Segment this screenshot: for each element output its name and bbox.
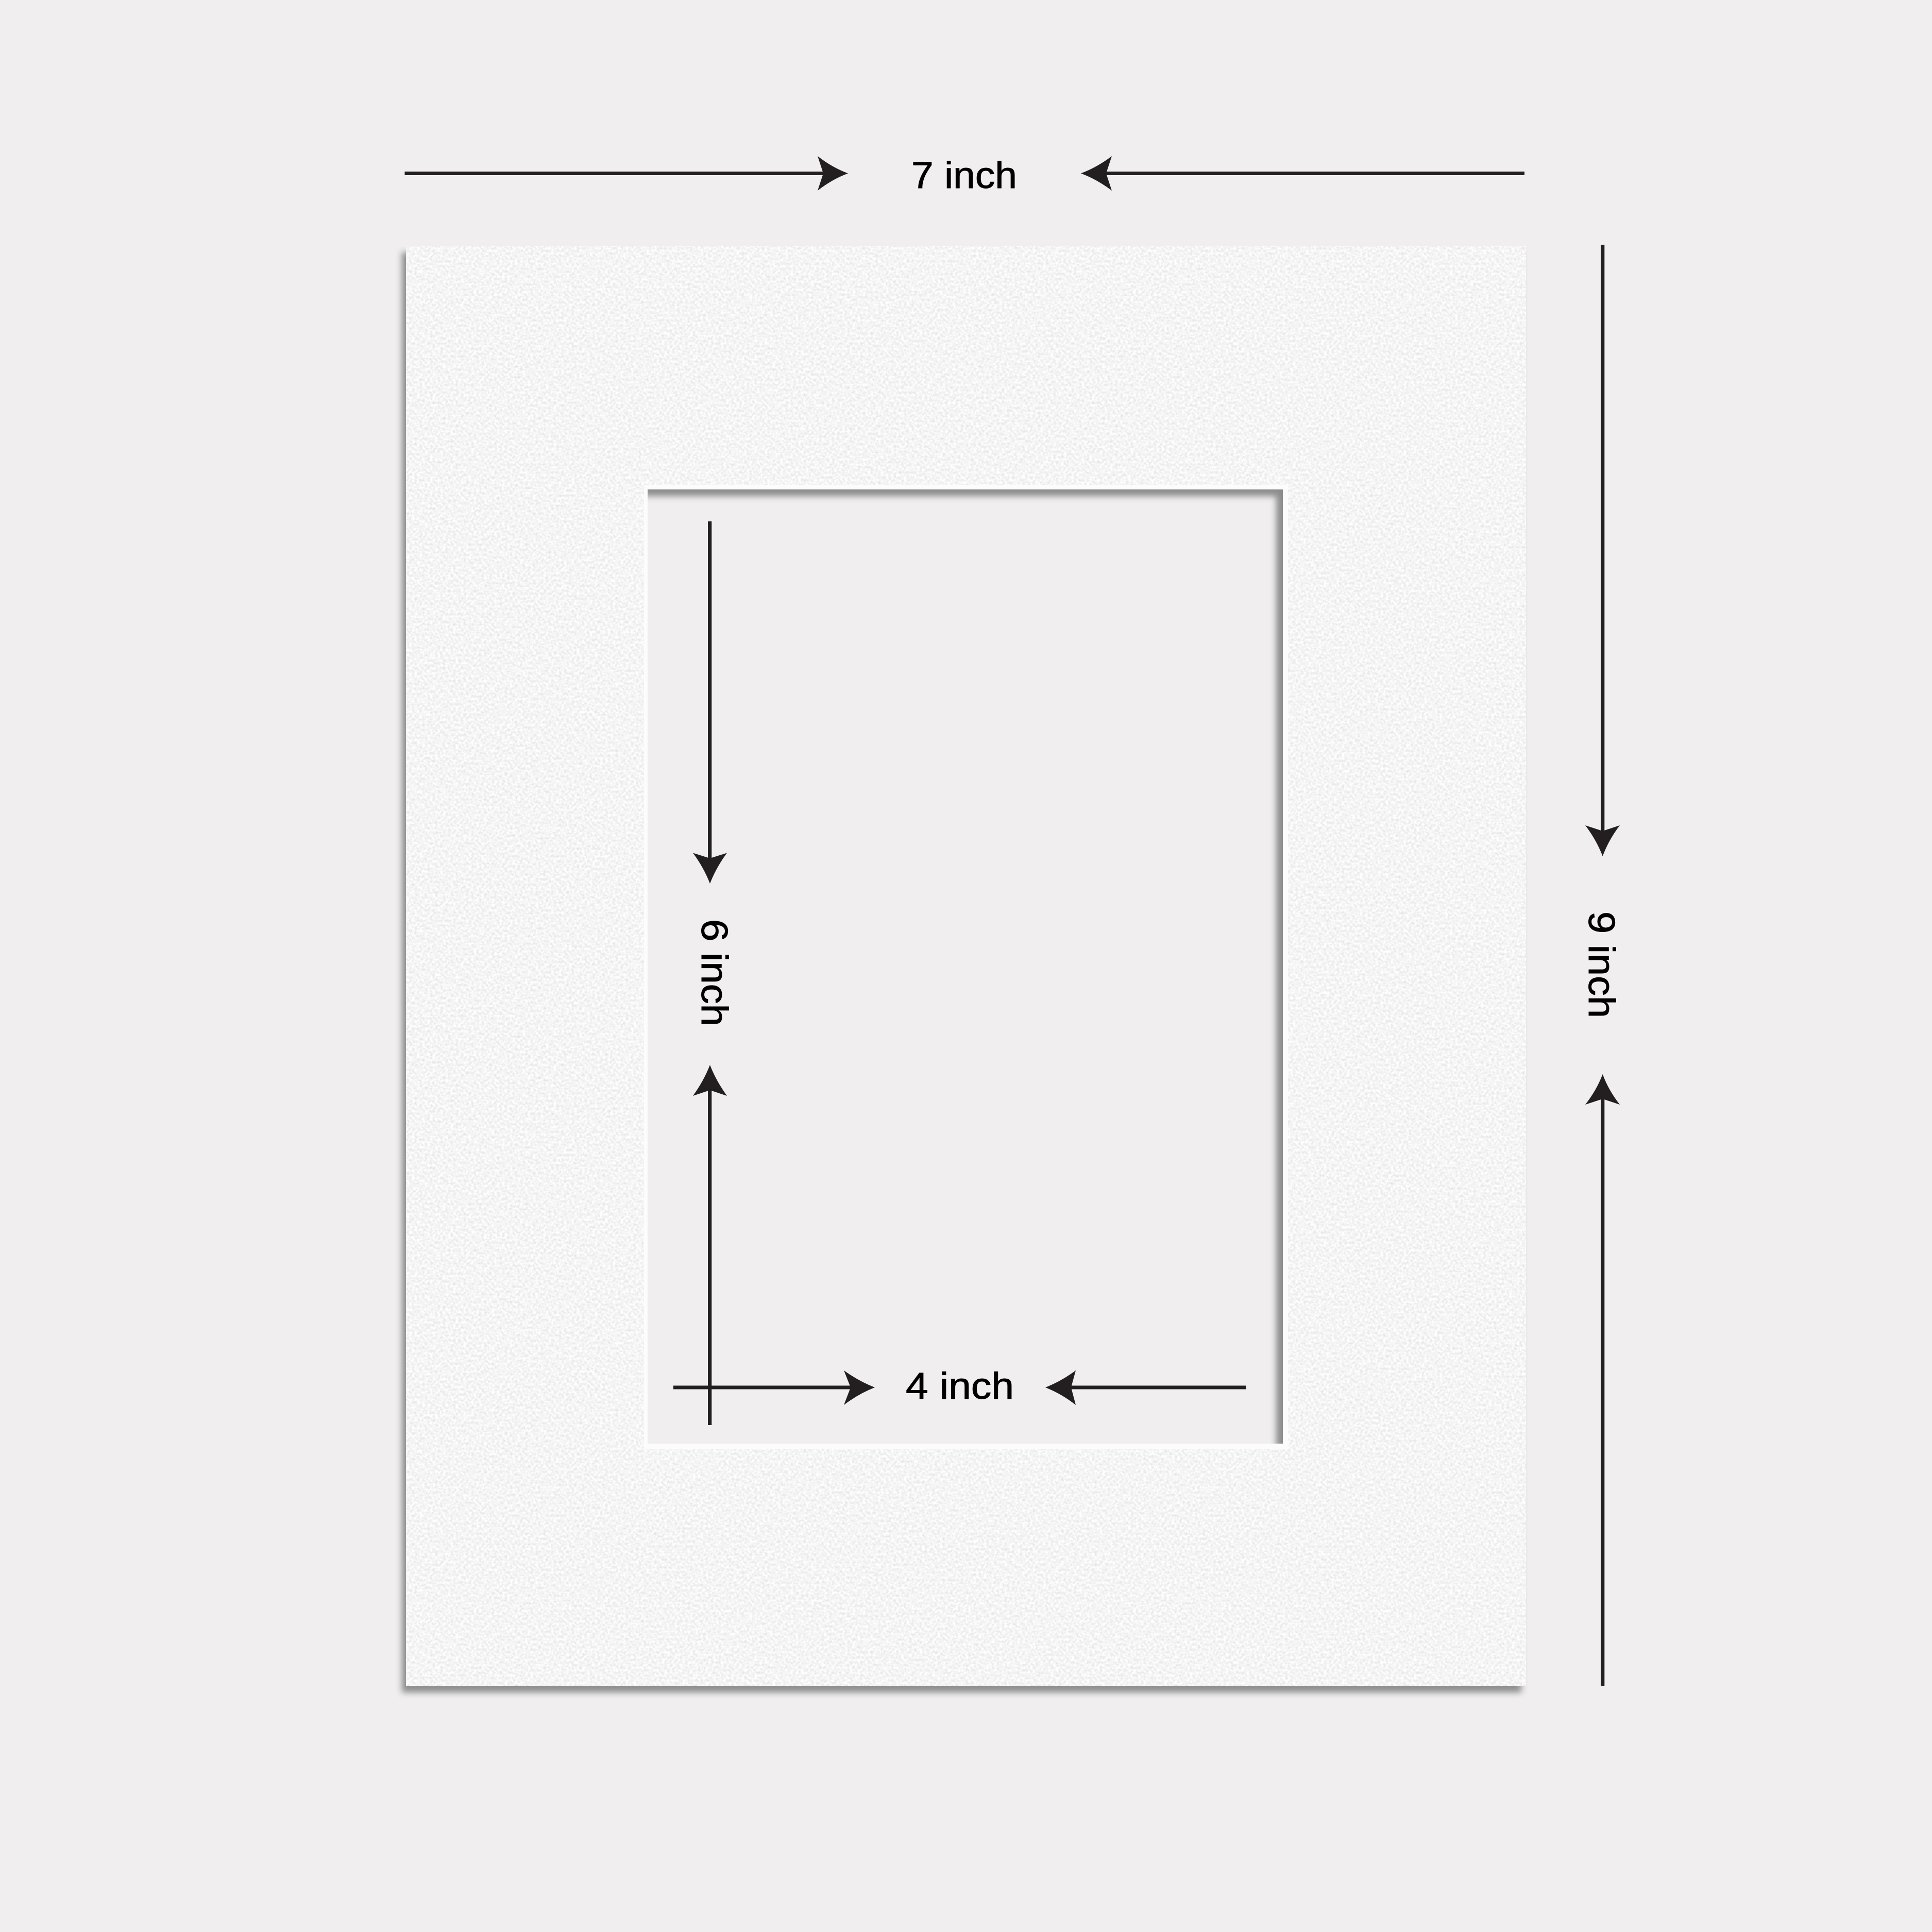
label: 9 inch: 9 inch [1581,911,1622,1018]
arrow: window height, pointing up [693,1065,727,1425]
arrow: top width, pointing right [405,156,848,191]
arrow: window height, pointing down [693,521,727,884]
arrow: window width, pointing left [1045,1370,1246,1405]
window bevel [644,485,1288,1449]
label: 6 inch: 6 inch [693,919,735,1026]
mat drop shadow [402,252,1521,1692]
arrow: right height, pointing down [1585,245,1620,856]
label: 7 inch: 7 inch [911,155,1017,196]
label: 4 inch: 4 inch [906,1366,1014,1407]
arrow: right height, pointing up [1585,1074,1620,1686]
mat paper surface [406,246,1526,1686]
window inner shadow [648,489,1283,1444]
window opening [648,489,1283,1444]
infographic canvas [398,156,1620,1697]
panel: white mat board [402,246,1526,1692]
arrow: window width, pointing right [673,1370,875,1405]
arrow: top width, pointing left [1081,156,1524,191]
